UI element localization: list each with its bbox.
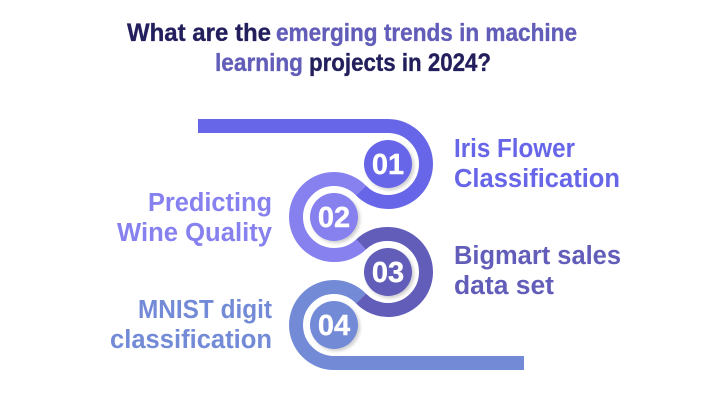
label: Predicting Wine Quality: Wine Quality [117, 219, 273, 247]
label: MNIST digit classification: MNIST digit [138, 296, 272, 324]
label: Predicting Wine Quality: Predicting [148, 189, 272, 217]
label: Bigmart sales data set [454, 242, 621, 300]
badge 02: 02 [318, 202, 350, 234]
badge 03: 03 [372, 257, 404, 289]
label: Iris Flower Classification: Classification [454, 165, 620, 193]
label: MNIST digit classification: classification [110, 326, 272, 354]
label: Predicting Wine Quality [117, 189, 273, 247]
title: emerging trends in machine [276, 19, 577, 47]
badge 04: 04 [318, 310, 350, 342]
title: learning [215, 49, 303, 77]
label: MNIST digit classification [110, 296, 272, 354]
step 03 ribbon [361, 234, 426, 310]
badge 01: 01 [372, 149, 404, 181]
badge 01 [364, 140, 412, 188]
title: projects in 2024? [309, 49, 491, 77]
badge 03 [364, 248, 412, 296]
badge 04 [310, 301, 358, 349]
title [127, 19, 577, 77]
label: Iris Flower Classification [454, 135, 620, 193]
step 02 ribbon [296, 179, 361, 255]
step 01 ribbon [198, 126, 426, 202]
step 04 ribbon [296, 287, 524, 363]
label: Bigmart sales data set: data set [454, 272, 555, 300]
label: Iris Flower Classification: Iris Flower [454, 135, 575, 163]
label: Bigmart sales data set: Bigmart sales [454, 242, 621, 270]
title: What are the [127, 19, 271, 47]
badge 02 [310, 193, 358, 241]
